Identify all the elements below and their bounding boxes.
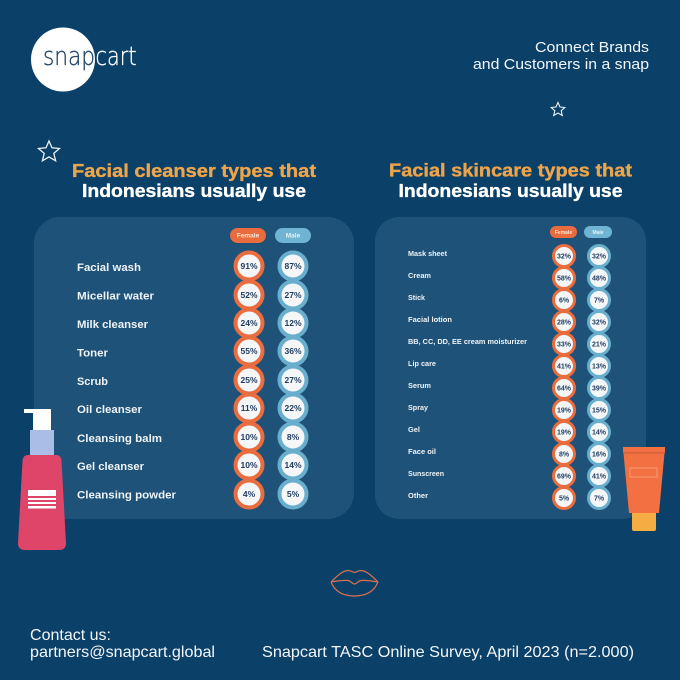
row: Milk cleanser: 24%	[240, 318, 258, 328]
row: Cleansing powder: 4%	[243, 489, 256, 499]
row: Oil cleanser: Oil cleanser	[77, 404, 143, 416]
row: Gel: Gel	[408, 427, 420, 434]
legend: female	[230, 228, 266, 243]
tagline: and Customers in a snap	[473, 57, 649, 73]
row: Sunscreen	[408, 466, 610, 486]
row: Oil cleanser: 11%	[241, 403, 258, 413]
legend: female: Female	[555, 230, 572, 236]
icon: large star	[38, 141, 60, 161]
row: Cleansing balm: 10%	[240, 432, 258, 442]
row: Facial lotion: 28%	[557, 320, 572, 326]
row: Toner: 36%	[284, 346, 302, 356]
row: Facial wash: 91%	[240, 261, 258, 271]
logo: snapcart: snap	[43, 42, 95, 72]
row: Scrub: 25%	[240, 375, 258, 385]
row: Cream	[408, 268, 610, 288]
contact text: Contact us:	[30, 627, 111, 644]
row: Mask sheet: 32%	[592, 254, 607, 260]
row: Serum: 64%	[557, 386, 572, 392]
row: Lip care: 41%	[557, 364, 572, 370]
row: BB, CC, DD, EE cream moisturizer: 33%	[557, 342, 572, 348]
icon: sunscreen tube	[623, 447, 665, 531]
row: Cleansing balm	[77, 424, 306, 450]
row: Sunscreen: 41%	[592, 474, 607, 480]
row: Face oil: 8%	[559, 452, 570, 458]
row: BB, CC, DD, EE cream moisturizer: BB, CC, DD, EE cream moisturizer	[408, 339, 527, 346]
row: Sunscreen: 69%	[557, 474, 572, 480]
row: Gel: 14%	[592, 430, 607, 436]
row: Other: 5%	[559, 496, 570, 502]
row: Scrub: 27%	[284, 375, 302, 385]
row: Milk cleanser	[77, 310, 306, 336]
row: Facial lotion: Facial lotion	[408, 317, 452, 324]
row: Cleansing balm: 8%	[287, 432, 300, 442]
row: Stick	[408, 290, 610, 310]
row: Spray: 15%	[592, 408, 607, 414]
row: Mask sheet	[408, 246, 610, 266]
row: BB, CC, DD, EE cream moisturizer	[408, 334, 610, 354]
row: Gel cleanser: 10%	[240, 460, 258, 470]
row: Oil cleanser: 22%	[284, 403, 302, 413]
row: Serum	[408, 378, 610, 398]
row: Facial wash: Facial wash	[77, 262, 141, 274]
heading: facial skincare: Facial skincare types that	[389, 160, 632, 180]
row: Cream: 48%	[592, 276, 607, 282]
row: Spray	[408, 400, 610, 420]
icon: small star	[551, 102, 565, 116]
row: Oil cleanser	[77, 394, 306, 422]
row: Facial wash	[77, 252, 306, 280]
row: Other	[408, 488, 610, 508]
row: Other: 7%	[594, 496, 605, 502]
row: Cleansing powder: Cleansing powder	[77, 490, 177, 502]
row: Spray: 19%	[557, 408, 572, 414]
row: Gel	[408, 422, 610, 442]
row: Stick: 7%	[594, 298, 605, 304]
row: Facial wash: 87%	[284, 261, 302, 271]
tagline: Connect Brands	[535, 40, 649, 56]
row: Serum: Serum	[408, 383, 431, 390]
row: Toner: Toner	[77, 348, 109, 360]
row: Facial lotion	[408, 312, 610, 332]
heading: facial cleanser: Facial cleanser types that	[72, 161, 316, 181]
row: Mask sheet: 32%	[557, 254, 572, 260]
row: Micellar water	[77, 282, 306, 308]
row: Serum: 39%	[592, 386, 607, 392]
row: Cleansing balm: Cleansing balm	[77, 433, 162, 445]
row: Lip care: Lip care	[408, 361, 436, 368]
row: Cleansing powder	[77, 480, 306, 508]
row: Scrub: Scrub	[77, 376, 108, 388]
row: Facial lotion: 32%	[592, 320, 607, 326]
row: Mask sheet: Mask sheet	[408, 251, 448, 258]
legend: male	[275, 228, 311, 243]
row: Cream: 58%	[557, 276, 572, 282]
row: Toner	[77, 338, 306, 364]
row: Lip care	[408, 356, 610, 376]
row: Face oil	[408, 444, 610, 464]
row: Spray: Spray	[408, 405, 428, 412]
icon: lips	[331, 570, 378, 596]
row: Micellar water: 52%	[240, 290, 258, 300]
row: Micellar water: Micellar water	[77, 290, 155, 302]
logo: snapcart: cart	[96, 42, 136, 72]
row: Lip care: 13%	[592, 364, 607, 370]
legend: male: Male	[592, 230, 604, 236]
tagline	[473, 40, 649, 73]
heading: facial skincare: Indonesians usually use	[398, 181, 622, 201]
legend: male: Male	[286, 232, 301, 240]
contact text	[30, 627, 215, 661]
row: Other: Other	[408, 493, 428, 500]
row: Micellar water: 27%	[284, 290, 302, 300]
row: Face oil: Face oil	[408, 449, 436, 456]
row: Stick: 6%	[559, 298, 570, 304]
row: Stick: Stick	[408, 295, 425, 302]
panel: facial cleanser types	[34, 217, 354, 519]
legend: female: Female	[237, 232, 260, 240]
source text: Snapcart TASC Online Survey, April 2023 (n=2.000)	[262, 644, 634, 661]
row: Gel cleanser	[77, 452, 306, 478]
logo: snapcart	[31, 28, 136, 92]
row: Milk cleanser: Milk cleanser	[77, 319, 149, 331]
row: BB, CC, DD, EE cream moisturizer: 21%	[592, 342, 607, 348]
row: Cream: Cream	[408, 273, 431, 280]
row: Face oil: 16%	[592, 452, 607, 458]
heading: facial cleanser	[72, 161, 316, 201]
contact text: partners@snapcart.global	[30, 644, 215, 661]
row: Cleansing powder: 5%	[287, 489, 300, 499]
legend: female	[550, 226, 577, 238]
row: Gel: 19%	[557, 430, 572, 436]
panel: facial skincare types	[375, 217, 646, 519]
legend: male	[584, 226, 612, 238]
heading: facial cleanser: Indonesians usually use	[82, 181, 306, 201]
heading: facial skincare	[389, 160, 632, 201]
row: Milk cleanser: 12%	[284, 318, 302, 328]
icon: cleanser pump bottle	[18, 409, 66, 550]
row: Sunscreen: Sunscreen	[408, 471, 444, 478]
row: Gel cleanser: 14%	[284, 460, 302, 470]
row: Gel cleanser: Gel cleanser	[77, 461, 145, 473]
row: Toner: 55%	[240, 346, 258, 356]
row: Scrub	[77, 366, 306, 394]
